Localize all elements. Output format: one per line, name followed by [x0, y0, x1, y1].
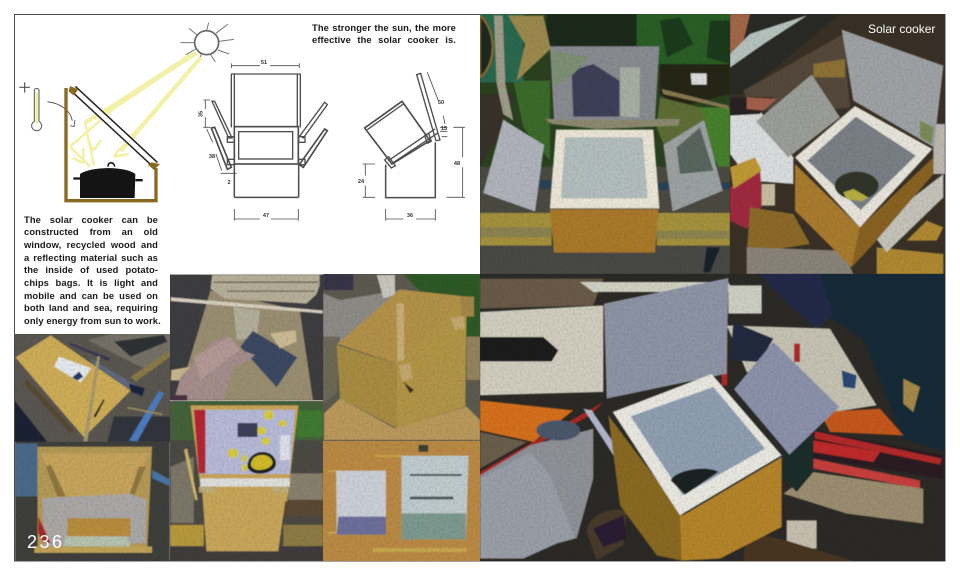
top reflector: [550, 46, 659, 120]
left reflector: [483, 120, 544, 211]
wooden box: [550, 209, 658, 253]
deck background: [730, 14, 945, 274]
top reflector: [842, 30, 943, 147]
text block: construction description: constructed from an old: [24, 226, 158, 237]
panel: photo of cooker in garden: [480, 14, 730, 274]
back reflector: [604, 278, 728, 399]
right reflector: [734, 342, 839, 455]
panel: photo of cooker with pot: [730, 14, 945, 274]
panel: photo of chip bag lid: [170, 401, 323, 561]
wooden box: [608, 415, 782, 561]
panel: photo of cooker on a boat: [480, 274, 945, 561]
text block: construction description: a reflecting material such as: [24, 252, 158, 263]
cooker frame: [66, 86, 160, 201]
icon: thermometer: [19, 82, 75, 131]
panel: photo of box interior with foil: [15, 442, 170, 561]
text block: construction description: window, recycled wood and: [24, 239, 158, 250]
text block: construction description: [24, 214, 161, 326]
dimension numbers: [198, 60, 460, 219]
photo caption: Solar cooker: [868, 22, 935, 36]
text block: construction description: The solar cooker can be: [24, 214, 158, 224]
right reflector: [663, 120, 723, 211]
icon: black pot: [73, 163, 143, 198]
dimension numbers: 38: [209, 154, 215, 160]
right reflector: [870, 174, 943, 252]
window frame: [550, 130, 659, 208]
text block: construction description: the inside of used potato-: [24, 264, 158, 275]
panel: photo of plywood and saw: [15, 334, 170, 442]
boat hull: [480, 274, 920, 442]
window frame: [613, 374, 782, 515]
dimension numbers: 51: [261, 60, 267, 66]
deck and red boards: [480, 402, 943, 562]
dimension numbers: 24: [358, 179, 365, 185]
text block: construction description: mobile and can be used on: [24, 290, 158, 301]
panel: photo of empty plywood box: [323, 274, 480, 441]
barrel hut: [480, 14, 551, 121]
technical drawing: front view with dimensions: [203, 63, 327, 221]
sun rays: [70, 51, 203, 167]
planks and ground: [480, 119, 730, 274]
wooden box: [795, 157, 933, 267]
text block: sun note: effective the solar cooker is.: [312, 34, 456, 45]
text block: construction description: chips bags. It is light and: [24, 277, 158, 288]
dimension numbers: 50: [438, 100, 444, 106]
dimension numbers: 48: [454, 161, 460, 167]
technical drawing: side view with dimensions: [363, 72, 465, 221]
text block: sun note: [312, 22, 456, 45]
dimension numbers: 35: [198, 111, 204, 117]
panel: photo of foil-covered boards: [323, 441, 480, 561]
panel: cooker cross-section sketch: [19, 23, 234, 201]
page number: 236: [27, 532, 65, 552]
dimension numbers: 15: [441, 126, 447, 132]
water: [757, 272, 946, 452]
text block: sun note: The stronger the sun, the more: [312, 22, 456, 32]
dimension numbers: 47: [263, 213, 269, 219]
window frame: [795, 106, 932, 227]
text block: construction description: only energy from sun to work.: [24, 315, 161, 326]
dimension numbers: 2: [227, 180, 231, 186]
front-left reflector: [583, 409, 670, 530]
text block: construction description: both land and sea, requiring: [24, 302, 158, 313]
left reflector: [756, 75, 840, 157]
green foliage background: [480, 14, 730, 171]
icon: sun: [181, 23, 234, 63]
dimension numbers: 36: [407, 213, 413, 219]
panel: photo of hand sanding a plank: [170, 274, 323, 401]
